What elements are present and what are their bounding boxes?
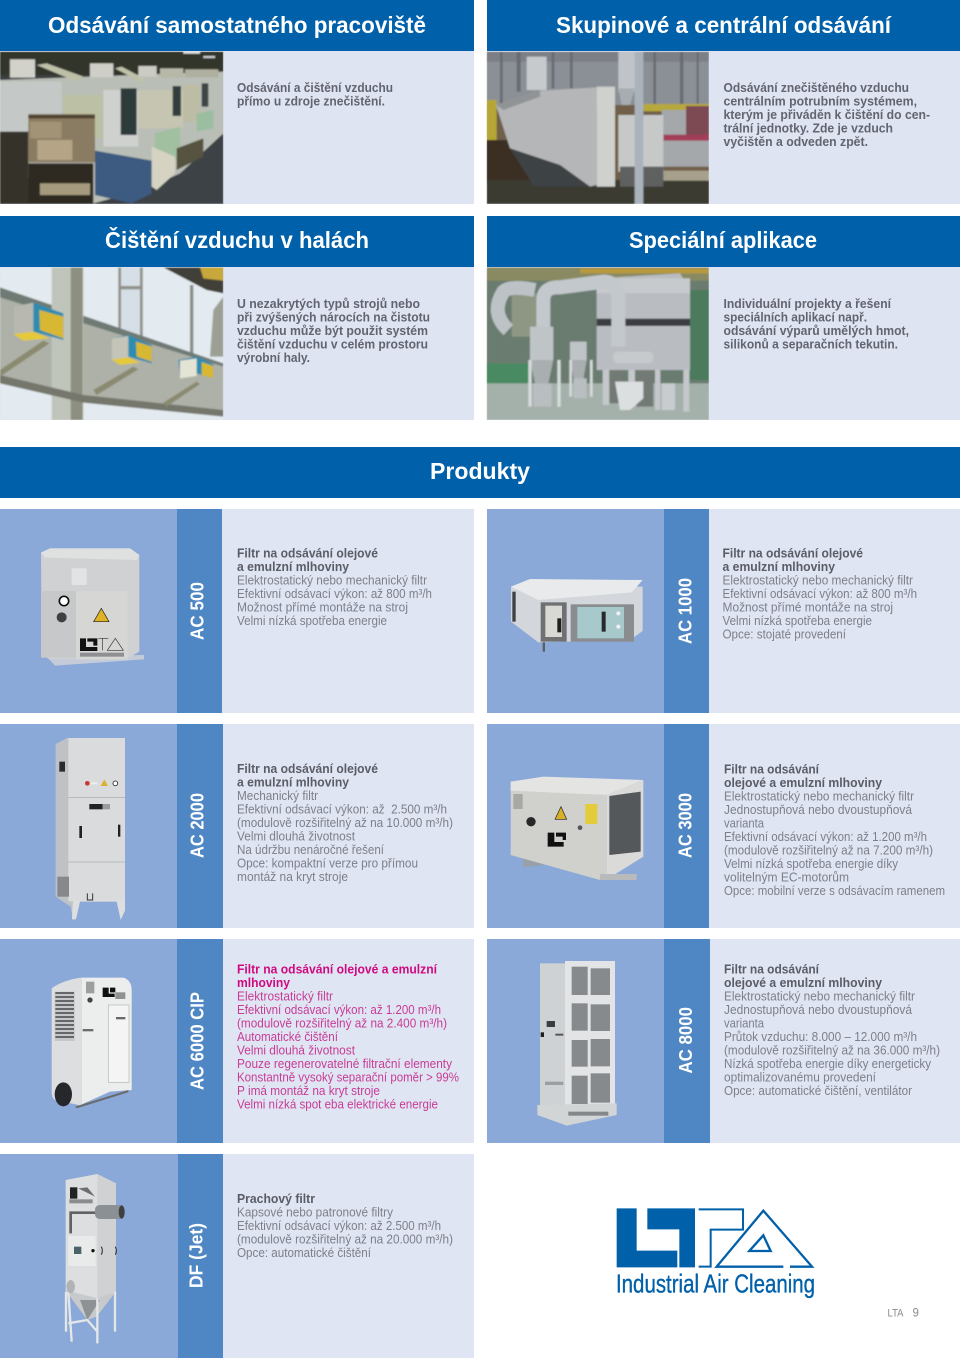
- label: AC 8000: AC 8000: [676, 1007, 696, 1074]
- text: AC 8000 specs: Elektrostatický nebo mechanický filtr: [724, 988, 916, 1004]
- panel: Odsávání samostatného pracoviště: [0, 0, 474, 204]
- text: AC 1000 specs: Možnost přímé montáže na stroj: [722, 600, 893, 614]
- logo: LTA Industrial Air Cleaning: Industrial Air Cleaning: [616, 1268, 815, 1298]
- logo: LTA Industrial Air Cleaning: [616, 1208, 815, 1298]
- photo: central extraction unit: [487, 52, 709, 204]
- text: AC 3000 specs: Elektrostatický nebo mechanický filtr: [724, 788, 915, 804]
- label: AC 6000 CIP: AC 6000 CIP: [188, 992, 208, 1090]
- heading: Skupinové a centrální odsávání: [487, 0, 960, 51]
- photo: row of machines with carts: [0, 52, 223, 204]
- text: central extraction description: Odsávání znečištěného vzduchu: [724, 80, 909, 95]
- label: AC 500: AC 500: [188, 582, 208, 640]
- panel: AC 8000: [487, 939, 960, 1143]
- heading: Produkty: [0, 447, 960, 498]
- text: DF (Jet) specs: (modulově rozšiřitelný až na 20.000 m³/h): [237, 1232, 453, 1246]
- label: AC 3000: AC 3000: [676, 793, 696, 858]
- text: AC 8000 specs: Průtok vzduchu: 8.000 – 12.000 m³/h: [724, 1029, 917, 1044]
- panel: AC 1000: [487, 509, 960, 713]
- heading: Čištění vzduchu v halách: [0, 216, 474, 267]
- text: AC 6000 CIP specs: Pouze regenerovatelné filtrační elementy: [237, 1056, 452, 1071]
- text: AC 1000 specs: Elektrostatický nebo mechanický filtr: [722, 572, 914, 588]
- text: AC 500 specs: Filtr na odsávání olejové: [237, 546, 378, 560]
- text: AC 1000 specs: Filtr na odsávání olejové: [722, 546, 863, 560]
- text: DF (Jet) specs: [237, 1191, 453, 1260]
- product image: DF (Jet): [66, 1174, 125, 1343]
- text: AC 3000 specs: Jednostupňová nebo dvoustupňová: [724, 802, 913, 817]
- text: hall air description: při zvýšených nárocích na čistotu: [237, 310, 430, 324]
- text: AC 8000 specs: varianta: [724, 1016, 765, 1030]
- text: AC 8000 specs: optimalizovanému provedení: [724, 1070, 876, 1084]
- text: AC 2000 specs: (modulově rozšiřitelný až na 10.000 m³/h): [237, 815, 453, 830]
- text: AC 2000 specs: Efektivní odsávací výkon: až 2.500 m³/h: [237, 802, 447, 816]
- text: AC 2000 specs: Mechanický filtr: [237, 788, 319, 803]
- page number: 9: [912, 1308, 919, 1320]
- text: special applications description: silikonů a separačních tekutin.: [724, 336, 898, 352]
- text: AC 6000 CIP specs: mlhoviny: [237, 975, 291, 990]
- text: AC 8000 specs: Nízká spotřeba energie díky energeticky: [724, 1056, 931, 1071]
- text: AC 500 specs: a emulzní mlhoviny: [237, 559, 350, 574]
- text: AC 2000 specs: Filtr na odsávání olejové: [237, 761, 378, 776]
- page number: [888, 1308, 919, 1320]
- text: intro: [237, 80, 393, 108]
- heading: Skupinové a centrální odsávání: Skupinové a centrální odsávání: [556, 12, 893, 38]
- text: AC 500 specs: [237, 546, 432, 628]
- product image: AC 6000 CIP: [52, 978, 132, 1108]
- text: intro: přímo u zdroje znečištění.: [237, 94, 385, 108]
- text: AC 6000 CIP specs: Konstantně vysoký separační poměr > 99%: [237, 1070, 459, 1084]
- text: AC 6000 CIP specs: Velmi nízká spot eba elektrické energie: [237, 1096, 438, 1112]
- text: AC 3000 specs: varianta: [724, 816, 765, 830]
- text: hall air description: čištění vzduchu v celém prostoru: [237, 336, 428, 352]
- text: central extraction description: kterým je přiváděn k čištění do cen-: [724, 107, 930, 122]
- text: AC 500 specs: Elektrostatický nebo mechanický filtr: [237, 572, 428, 588]
- heading: Speciální aplikace: Speciální aplikace: [629, 227, 817, 253]
- text: hall air description: [237, 296, 430, 365]
- text: AC 6000 CIP specs: P imá montáž na kryt stroje: [237, 1083, 380, 1098]
- label: AC 1000: AC 1000: [676, 578, 696, 644]
- product image: AC 500: [41, 548, 144, 666]
- text: special applications description: Individuální projekty a řešení: [724, 296, 891, 311]
- text: AC 1000 specs: Opce: stojaté provedení: [722, 626, 846, 642]
- photo: cyclones and dust collector: [487, 267, 709, 420]
- text: AC 6000 CIP specs: Elektrostatický filtr: [237, 988, 334, 1004]
- text: AC 500 specs: Velmi nízká spotřeba energie: [237, 613, 387, 628]
- text: AC 2000 specs: Velmi dlouhá životnost: [237, 828, 355, 844]
- text: AC 500 specs: Možnost přímé montáže na stroj: [237, 600, 408, 614]
- text: AC 6000 CIP specs: Automatické čištění: [237, 1029, 338, 1044]
- panel: AC 6000 CIP: [0, 939, 474, 1143]
- text: AC 3000 specs: volitelným EC-motorům: [724, 870, 849, 884]
- text: AC 2000 specs: [237, 761, 453, 884]
- text: AC 8000 specs: Opce: automatické čištění, ventilátor: [724, 1083, 913, 1098]
- text: AC 500 specs: Efektivní odsávací výkon: až 800 m³/h: [237, 586, 432, 601]
- text: AC 1000 specs: a emulzní mlhoviny: [722, 559, 836, 574]
- text: central extraction description: vyčištěn a odveden zpět.: [724, 134, 868, 149]
- text: DF (Jet) specs: Prachový filtr: [237, 1191, 315, 1206]
- heading: Speciální aplikace: [487, 216, 960, 267]
- text: AC 3000 specs: (modulově rozšiřitelný až na 7.200 m³/h): [724, 842, 933, 858]
- text: AC 2000 specs: a emulzní mlhoviny: [237, 774, 350, 790]
- heading: Čištění vzduchu v halách: Čištění vzduchu v halách: [105, 226, 369, 253]
- text: central extraction description: [724, 80, 930, 149]
- text: hall air description: výrobní haly.: [237, 350, 310, 365]
- text: AC 2000 specs: Opce: kompaktní verze pro přímou: [237, 856, 418, 870]
- text: AC 3000 specs: Efektivní odsávací výkon: až 1.200 m³/h: [724, 829, 927, 844]
- panel: AC 3000: [487, 724, 960, 928]
- text: AC 8000 specs: [724, 962, 940, 1098]
- text: AC 3000 specs: Filtr na odsávání: [724, 762, 819, 776]
- text: AC 8000 specs: (modulově rozšiřitelný až na 36.000 m³/h): [724, 1042, 940, 1058]
- text: AC 6000 CIP specs: Efektivní odsávací výkon: až 1.200 m³/h: [237, 1002, 441, 1017]
- text: AC 3000 specs: [724, 762, 945, 898]
- text: AC 3000 specs: Velmi nízká spotřeba energie díky: [724, 856, 898, 871]
- text: central extraction description: centrálním potrubním systémem,: [724, 94, 917, 108]
- label: AC 2000: AC 2000: [188, 793, 208, 858]
- text: intro: Odsávání a čištění vzduchu: [237, 80, 393, 95]
- text: special applications description: odsávání výparů umělých hmot,: [724, 323, 909, 338]
- text: AC 6000 CIP specs: Velmi dlouhá životnost: [237, 1042, 355, 1058]
- text: AC 1000 specs: Efektivní odsávací výkon: až 800 m³/h: [722, 586, 917, 601]
- text: DF (Jet) specs: Efektivní odsávací výkon: až 2.500 m³/h: [237, 1218, 441, 1233]
- text: AC 2000 specs: Na údržbu nenáročné řešení: [237, 842, 384, 857]
- heading: Produkty: Produkty: [430, 458, 530, 484]
- text: AC 6000 CIP specs: [237, 962, 459, 1112]
- heading: Odsávání samostatného pracoviště: Odsávání samostatného pracoviště: [48, 12, 426, 38]
- text: AC 8000 specs: olejové a emulzní mlhoviny: [724, 975, 883, 990]
- text: special applications description: speciálních aplikací např.: [724, 310, 867, 324]
- label: DF (Jet): DF (Jet): [186, 1223, 206, 1288]
- photo: hall units on columns: [0, 267, 223, 420]
- text: AC 8000 specs: Filtr na odsávání: [724, 962, 819, 976]
- page number: LTA: [888, 1308, 904, 1320]
- text: DF (Jet) specs: Opce: automatické čištění: [237, 1245, 371, 1260]
- panel: Čištění vzduchu v halách: [0, 216, 474, 420]
- panel: AC 500: [0, 509, 474, 713]
- text: AC 1000 specs: [722, 546, 917, 642]
- product image: AC 1000: [511, 579, 643, 652]
- product image: AC 2000: [56, 737, 125, 920]
- text: hall air description: U nezakrytých typů strojů nebo: [237, 296, 420, 311]
- text: AC 8000 specs: Jednostupňová nebo dvoustupňová: [724, 1002, 913, 1017]
- panel: Skupinové a centrální odsávání: [487, 0, 960, 204]
- text: AC 6000 CIP specs: (modulově rozšiřitelný až na 2.400 m³/h): [237, 1016, 447, 1030]
- text: AC 2000 specs: montáž na kryt stroje: [237, 869, 348, 884]
- text: central extraction description: trální jednotky. Zde je vzduch: [724, 120, 893, 136]
- product image: AC 3000: [511, 777, 643, 880]
- text: AC 1000 specs: Velmi nízká spotřeba energie: [722, 613, 872, 628]
- text: AC 3000 specs: olejové a emulzní mlhoviny: [724, 775, 883, 790]
- text: DF (Jet) specs: Kapsové nebo patronové filtry: [237, 1204, 393, 1220]
- panel: AC 2000: [0, 724, 474, 928]
- panel: Speciální aplikace: [487, 216, 960, 420]
- text: AC 6000 CIP specs: Filtr na odsávání olejové a emulzní: [237, 962, 437, 976]
- text: hall air description: vzduchu může být použit systém: [237, 323, 428, 338]
- product image: AC 8000: [537, 961, 617, 1126]
- heading: Odsávání samostatného pracoviště: [0, 0, 474, 51]
- panel: DF (Jet): [0, 1154, 474, 1358]
- text: special applications description: [724, 296, 909, 352]
